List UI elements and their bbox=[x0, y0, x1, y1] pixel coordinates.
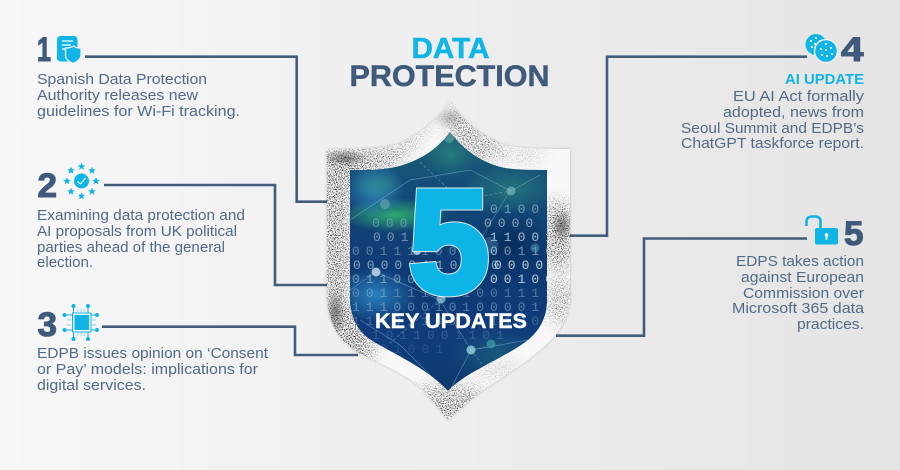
binary digit rows: 0110000 bbox=[352, 272, 449, 287]
big number 5: 5 bbox=[409, 160, 489, 323]
text: update 4: Seoul Summit and EDPB’s bbox=[681, 120, 864, 137]
binary digit rows: 0000 bbox=[372, 216, 427, 231]
icon: document with shield bbox=[57, 36, 81, 64]
text: update 2: AI proposals from UK political bbox=[37, 223, 237, 240]
binary digit rows bbox=[352, 204, 547, 353]
text: update 5: Commission over bbox=[743, 285, 864, 302]
text: update 3: EDPB issues opinion on ‘Consent bbox=[37, 345, 269, 362]
text: update 4: ChatGPT taskforce report. bbox=[681, 135, 864, 152]
text: update 3: or Pay’ models: implications for bbox=[37, 361, 258, 378]
panel: update 2 bbox=[37, 163, 245, 271]
number 3: 3 bbox=[38, 306, 57, 344]
panel: update 5 bbox=[732, 215, 865, 333]
panel: update 1 bbox=[37, 31, 240, 120]
icon: circle of stars with check bbox=[63, 163, 100, 199]
title line: DATA: DATA bbox=[412, 33, 490, 65]
text: update 2: parties ahead of the general bbox=[37, 239, 225, 256]
text: update 2: election. bbox=[37, 254, 93, 271]
text: update 5 bbox=[732, 253, 865, 333]
binary digit rows: 00000110000 bbox=[353, 258, 505, 273]
text: update 1 bbox=[37, 71, 240, 120]
text: update 3 bbox=[37, 345, 269, 394]
title bbox=[350, 33, 550, 93]
text: update 2: Examining data protection and bbox=[37, 207, 245, 224]
shield bbox=[326, 102, 572, 420]
shield inner panel bbox=[350, 132, 547, 391]
number 2: 2 bbox=[38, 167, 57, 205]
text: update 4 bbox=[681, 88, 865, 152]
text: update 5: against European bbox=[741, 269, 864, 286]
binary digit rows: 110010 bbox=[490, 230, 573, 245]
number 5: 5 bbox=[844, 215, 864, 253]
binary digit rows: 11001100101100100 bbox=[352, 314, 587, 329]
binary digit rows: 001100 bbox=[490, 244, 573, 259]
binary digit rows: 00111100100111111 bbox=[352, 286, 587, 301]
panel: update 4 bbox=[681, 31, 865, 152]
binary digit rows: 00001 bbox=[494, 258, 563, 273]
number 1: 1 bbox=[37, 31, 51, 69]
binary digit rows: 01001 bbox=[380, 342, 449, 357]
binary digit rows: 00111100000 bbox=[352, 244, 504, 259]
connector lines bbox=[85, 57, 807, 355]
binary digit rows: 0000 bbox=[484, 216, 539, 231]
number 4: 4 bbox=[841, 31, 864, 69]
text: update 3: digital services. bbox=[37, 377, 146, 394]
title line: PROTECTION: PROTECTION bbox=[350, 60, 550, 93]
text: update 5: practices. bbox=[797, 316, 864, 333]
shield silver frame bbox=[327, 102, 570, 420]
binary digit rows: 00100 bbox=[490, 272, 559, 287]
binary digit rows: 0011 bbox=[373, 230, 428, 245]
icon: two cookies bbox=[806, 34, 838, 62]
big number 5: 5 bbox=[409, 160, 489, 323]
binary digit rows: 11011001101 bbox=[358, 328, 510, 343]
text: update 5: Microsoft 365 data bbox=[732, 300, 865, 317]
panel: update 3 bbox=[37, 304, 269, 394]
heading: AI UPDATE: AI UPDATE bbox=[785, 71, 864, 88]
shield caption: KEY UPDATES: KEY UPDATES bbox=[375, 310, 527, 333]
text: update 1: guidelines for Wi-Fi tracking. bbox=[37, 103, 240, 120]
text: update 5: EDPS takes action bbox=[736, 253, 864, 270]
binary digit rows: 11100010100001011 bbox=[352, 300, 587, 315]
binary digit rows: 0100 bbox=[490, 202, 545, 217]
text: update 4: adopted, news from bbox=[723, 104, 864, 121]
text: update 2 bbox=[37, 207, 245, 271]
text: update 1: Authority releases new bbox=[37, 87, 198, 104]
icon: open padlock bbox=[806, 216, 838, 244]
text: update 1: Spanish Data Protection bbox=[37, 71, 207, 88]
icon: microchip bbox=[62, 304, 99, 341]
text: update 4: EU AI Act formally bbox=[733, 88, 865, 105]
network lines and nodes bbox=[350, 162, 540, 390]
